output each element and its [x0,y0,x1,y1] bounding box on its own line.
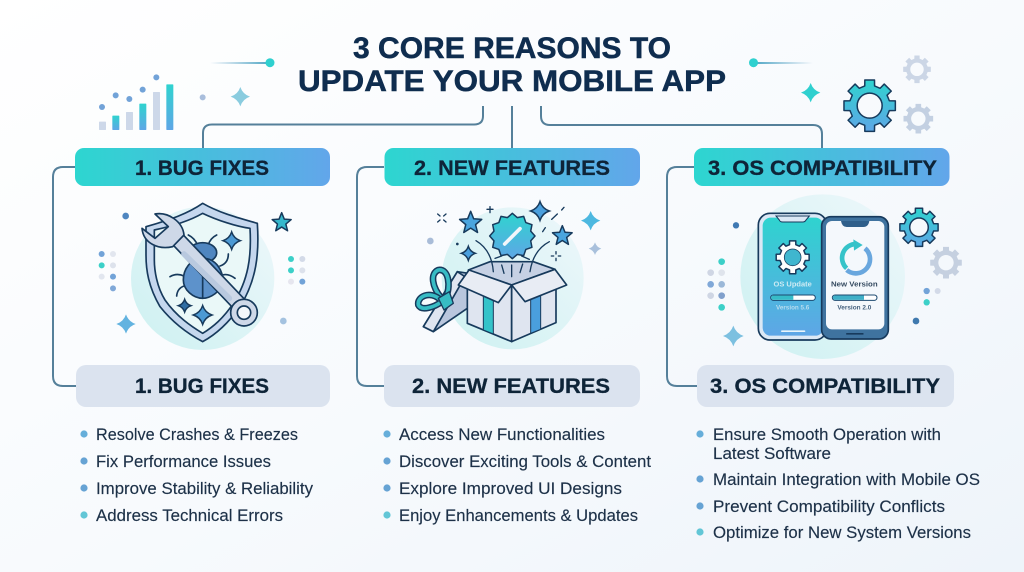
heading: new features grey label: 2. NEW FEATURES [412,375,610,398]
panel: new features [383,148,651,525]
title [298,32,726,98]
icon: decorative gears top right [801,56,933,133]
list: os compatibility points: Maintain Integration with Mobile OS [713,471,980,489]
list: new features points: Enjoy Enhancements & Updates [399,507,638,525]
list: new features points: Explore Improved UI Designs [399,480,622,498]
connector: panel 1 side bracket [53,167,76,386]
panel: bug fixes [75,148,330,525]
title: UPDATE YOUR MOBILE APP [298,65,726,98]
panel: os compatibility [694,148,980,542]
heading: os compatibility grey label: 3. OS COMPATIBILITY [710,375,940,398]
list: bug fixes points: Fix Performance Issues [96,453,271,471]
connector: panel 3 side bracket [667,167,697,386]
connector: panel 2 side bracket [357,167,384,386]
heading: bug fixes grey label: 1. BUG FIXES [135,375,269,398]
list: os compatibility points: Ensure Smooth Operation with [713,426,941,444]
icon: open gift box with stars [418,202,601,349]
icon: small bar chart [99,74,250,130]
connectors from title to panels [203,106,822,148]
list: new features points: Access New Functionalities [399,426,605,444]
list: os compatibility points: Prevent Compatibility Conflicts [713,498,945,516]
heading: new features gradient header: 2. NEW FEATURES [414,157,610,180]
decoration: right title accent line [749,58,813,67]
heading: bug fixes gradient header: 1. BUG FIXES [135,157,269,180]
heading: bug fixes grey label [76,365,330,407]
list: new features points [383,426,651,525]
list: os compatibility points: Optimize for New System Versions [713,524,971,542]
list: bug fixes points: Improve Stability & Reliability [96,480,314,498]
icon: two phones updating: New Version [831,280,878,289]
decoration: left title accent line [210,58,274,67]
list: bug fixes points: Address Technical Errors [96,507,283,525]
icon: two phones updating [707,194,962,359]
title: 3 CORE REASONS TO [353,32,671,65]
list: bug fixes points [80,426,314,525]
heading: os compatibility gradient header [694,148,950,186]
icon: two phones updating: Version 5.6 [776,305,810,311]
list: os compatibility points: Latest Software [713,445,831,463]
icon: shield, bug and wrench [99,203,305,350]
heading: os compatibility gradient header: 3. OS COMPATIBILITY [708,157,937,180]
icon: two phones updating: OS Update [773,280,812,289]
heading: new features gradient header [384,148,640,186]
list: bug fixes points: Resolve Crashes & Freezes [96,426,298,444]
heading: new features grey label [384,365,640,407]
icon: two phones updating: Version 2.0 [837,305,872,311]
list: new features points: Discover Exciting Tools & Content [399,453,651,471]
list: os compatibility points [696,426,980,542]
heading: os compatibility grey label [697,365,954,407]
heading: bug fixes gradient header [75,148,330,186]
